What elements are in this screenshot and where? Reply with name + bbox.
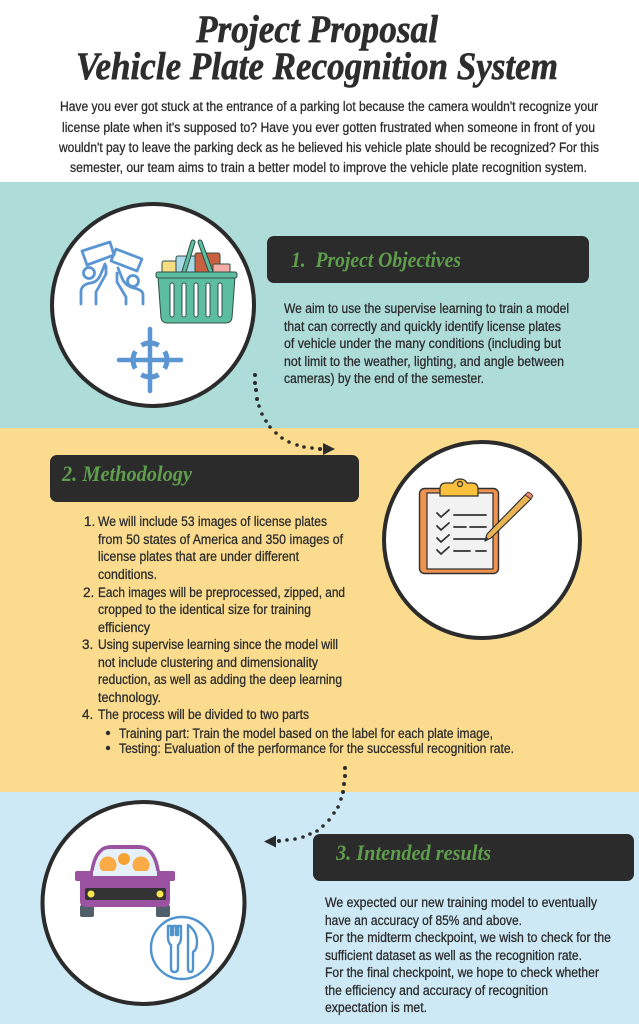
panel: project objectives [0,182,639,428]
numbered list: methodology steps: Training part: Train the model based on the label for each plate image, [119,726,493,741]
text block: objectives: We aim to use the supervise learning to train a model [284,301,569,316]
icon: crosshair target [119,329,181,391]
intro text block [58,99,599,175]
icon: car front view [75,845,175,917]
text block: intended results: expectation is met. [325,1000,427,1015]
heading bar: project objectives [267,236,589,283]
icon circle: methodology [384,442,580,638]
icon: fork and knife in circle [151,917,213,979]
heading bar: intended results: 3. Intended results [335,840,491,865]
heading bar: intended results [313,834,634,881]
intro text block: semester, our team aims to train a better model to improve the vehicle plate recognition system. [70,160,587,175]
text block: objectives: of vehicle under the many conditions (including but [284,336,561,351]
numbered list: methodology steps: license plates that are under different [98,549,299,564]
text block: intended results: the efficiency and accuracy of recognition [325,983,548,998]
numbered list: methodology steps: 2. [83,585,94,600]
numbered list: methodology steps: conditions. [98,567,157,582]
text block: intended results: For the midterm checkpoint, we wish to check for the [325,930,611,945]
numbered list: methodology steps: 1. [84,514,95,529]
numbered list: methodology steps: 3. [82,637,93,652]
text block: intended results: sufficient dataset as well as the recognition rate. [325,948,582,963]
arrow: dotted from methodology to results [264,766,347,848]
numbered list: methodology steps: cropped to the identical size for training [98,602,311,617]
numbered list: methodology steps: from 50 states of America and 350 images of [98,532,343,547]
numbered list: methodology steps: Testing: Evaluation of the performance for the successful recognition rate. [119,741,514,756]
title: Vehicle Plate Recognition System [76,45,558,88]
numbered list: methodology steps: The process will be divided to two parts [98,707,309,722]
text block: intended results: We expected our new training model to eventually [325,895,597,910]
numbered list: methodology steps: We will include 53 images of license plates [98,514,327,529]
title [76,8,558,88]
heading bar: methodology [50,455,359,502]
intro text block: license plate when it's supposed to? Have you ever gotten frustrated when someone in front of you [62,120,595,135]
text block: objectives: cameras) by the end of the semester. [284,371,484,386]
numbered list: methodology steps: 4. [82,707,93,722]
numbered list: methodology steps: technology. [98,690,161,705]
heading bar: methodology: 2. Methodology [61,461,192,486]
icon circle: results [42,802,244,1004]
heading bar: project objectives: 1. Project Objectives [291,247,461,272]
numbered list: methodology steps: not include clustering and dimensionality [98,655,318,670]
text block: objectives [284,301,569,386]
numbered list: methodology steps: efficiency [98,620,150,635]
text block: intended results [325,895,611,1015]
numbered list: methodology steps: Using supervise learning since the model will [98,637,338,652]
icon: people holding signs [81,242,143,304]
text block: intended results: have an accuracy of 85% and above. [325,913,522,928]
numbered list: methodology steps [82,514,514,756]
text block: objectives: not limit to the weather, lighting, and angle between [284,354,564,369]
icon: clipboard and pencil [420,479,533,574]
panel: page header [0,0,639,182]
icon circle: objectives [52,204,254,406]
arrow: dotted from objectives to methodology [253,373,335,455]
icon: shopping basket [156,242,237,323]
panel: methodology [0,428,639,792]
panel: intended results [0,792,639,1024]
numbered list: methodology steps: reduction, as well as adding the deep learning [98,672,342,687]
numbered list: methodology steps: Each images will be preprocessed, zipped, and [98,585,345,600]
text block: objectives: that can correctly and quickly identify license plates [284,319,561,334]
title: Project Proposal [195,8,438,51]
text block: intended results: For the final checkpoint, we hope to check whether [325,965,599,980]
